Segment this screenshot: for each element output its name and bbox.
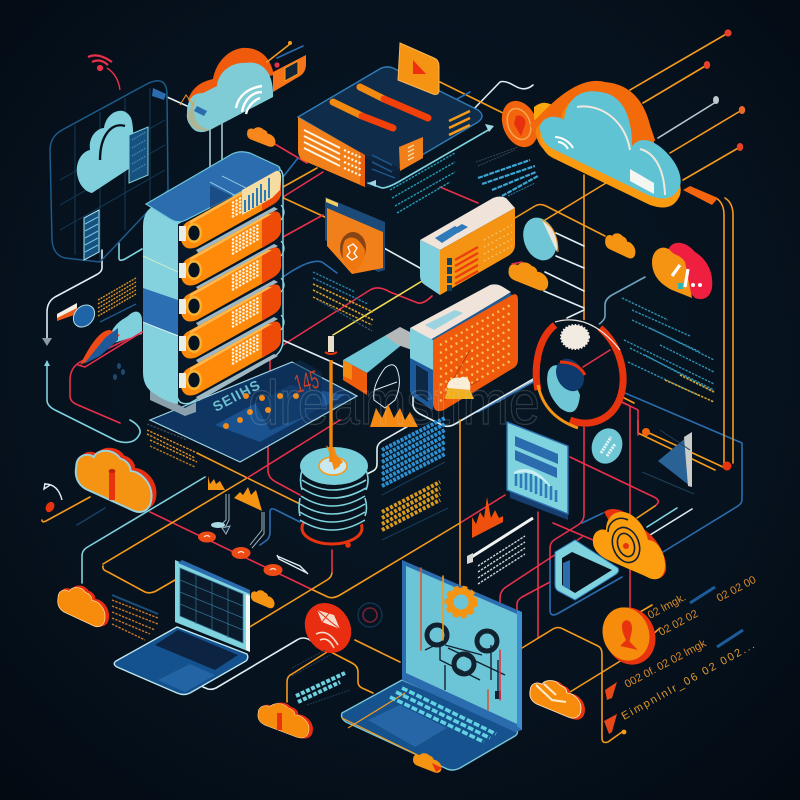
icon: wave cloud (78, 312, 142, 367)
icon: keyboard (390, 688, 496, 742)
icon: bottom chevron cloud (530, 680, 585, 720)
icon: orange dashed data block (98, 278, 136, 322)
label row 4: Eimpnlnlr_06 02 002... (620, 639, 757, 723)
text block: center dashes (313, 272, 373, 331)
panel: platform under server (150, 360, 357, 462)
panel: small laptop (114, 560, 250, 694)
icon: top left lower cloud alert (76, 448, 156, 512)
arrow: white curved arrow (44, 483, 62, 500)
icon: brain circle (587, 424, 627, 468)
chart: mini peaks (208, 476, 262, 511)
bar: rear pill (360, 87, 428, 118)
icon: red node 1 (198, 532, 216, 542)
icon: faint rain drops (113, 363, 125, 380)
icon: database stack (299, 445, 368, 548)
icon: person badge (595, 600, 663, 672)
icon: small right cloud (605, 233, 635, 258)
icon: hanging plugs (211, 494, 264, 548)
icon: dim round lock (358, 603, 382, 627)
heading: platform label: SEIIHS (210, 376, 263, 415)
icon: orange cube and bar (343, 327, 414, 395)
icon: orange flame peaks (370, 404, 418, 427)
icon: play card (398, 43, 439, 94)
icon: red status dot (44, 500, 56, 514)
icon: striped module upper (129, 127, 148, 183)
icon: cloud with left orange (508, 262, 548, 291)
icon: orange diamond 1 (605, 682, 617, 700)
panel: main server rack (143, 152, 284, 416)
icon: wifi signal (88, 55, 120, 90)
icon: pie device (517, 213, 563, 265)
icon: small orange cloud (247, 127, 275, 147)
left grid panel (50, 81, 168, 262)
connector lines (42, 82, 742, 742)
icon: blue badge (69, 301, 99, 331)
icon: laptop side cloud (251, 590, 275, 608)
text block: lower left orange dots (112, 595, 158, 640)
icon: orange gear (446, 587, 476, 617)
icon: orange swirl (495, 95, 545, 153)
icon: bottom lock cloud (258, 702, 313, 739)
icon: top cloud with wifi (152, 41, 306, 132)
bar: front pill (333, 102, 393, 128)
icon: helmet (445, 377, 474, 399)
label row 1 end: 02 02 00 (715, 574, 758, 605)
icon: white gear (561, 325, 589, 349)
label row 2: 02 02 02 (657, 608, 700, 639)
label row 1: 02 lmgk. (646, 592, 688, 622)
panel: server drawers (179, 175, 281, 401)
text block: bottom right labels (620, 574, 758, 723)
icon: wing outline (374, 365, 399, 408)
watermark: dreamstime (248, 369, 540, 438)
text block: white bar caption (467, 518, 533, 584)
icon: blue connector (194, 106, 207, 116)
icon: cloud attached device (267, 41, 306, 92)
icon: mail cloud (296, 594, 360, 662)
icon: panel cloud (77, 111, 133, 193)
chart: ring gauge (536, 320, 625, 428)
icon: prism triangle (642, 428, 732, 494)
text block: platform number: 145 (292, 366, 322, 399)
chart: server bar chart (242, 171, 281, 215)
label row 3: 002 0f. 02 02 lmgk (623, 637, 709, 691)
icon: gold target cloud (593, 509, 666, 579)
text block: lower left dashes (147, 424, 197, 467)
icon: left bottom cloud (58, 586, 109, 627)
text block: top right dashes (476, 147, 538, 196)
icon: lock shield panel (325, 197, 385, 274)
chart: tablet (507, 422, 568, 520)
icon: orange pole (325, 336, 337, 462)
icon: red node 3 (264, 564, 282, 576)
panel: top storage box (298, 67, 494, 188)
icon: red node 2 (232, 547, 250, 559)
icon: gears (425, 625, 505, 699)
icon: teal socket device (555, 540, 619, 600)
accent bars (690, 587, 743, 647)
panel: big laptop (342, 560, 522, 770)
icon: end node (622, 730, 626, 734)
panel: main cloud (495, 29, 745, 207)
panel: orange grid machine (410, 284, 518, 411)
icon: grid device box (420, 196, 515, 295)
icon: small orange card (399, 137, 423, 171)
icon: small white orange tag (57, 303, 77, 321)
icon: bottom small cloud (413, 753, 442, 773)
chart: orange spike chart (472, 497, 503, 538)
arrow: left up arrow (44, 360, 50, 366)
icon: small angled bracket (277, 555, 308, 574)
icon: striped module lower (84, 210, 99, 260)
icon: pin dots (630, 29, 745, 180)
text block: keyboard card (292, 650, 350, 705)
icon: ring inner (547, 350, 610, 412)
text block: right column (622, 298, 714, 402)
text block: top middle dashes (390, 153, 455, 213)
icon: orange diamond 2 (604, 714, 617, 734)
icon: red orange status cloud (652, 243, 712, 299)
text block: central blue table (382, 418, 448, 540)
icon: node white marks (204, 536, 276, 570)
arrow: left down arrow (42, 338, 52, 346)
